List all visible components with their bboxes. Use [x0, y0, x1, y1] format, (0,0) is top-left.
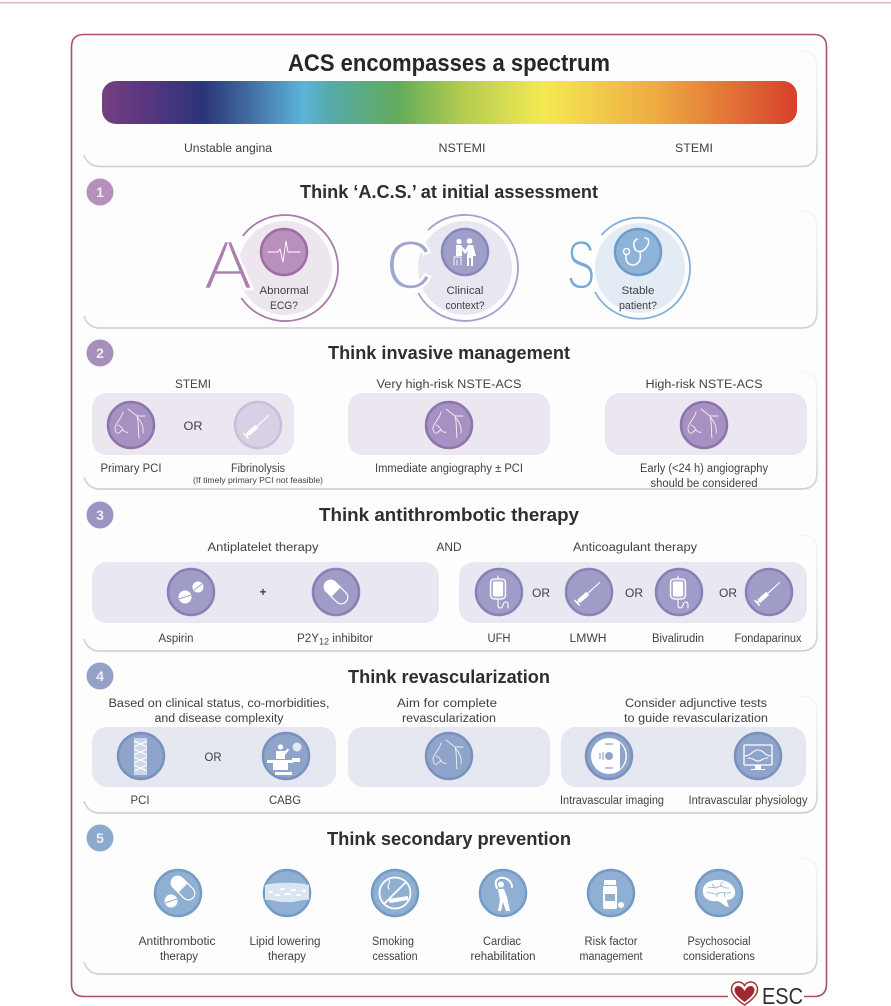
column: high-risk: should be considered [650, 478, 758, 490]
panel: spectrum [84, 50, 817, 166]
column: very high-risk: Very high-risk NSTE-ACS [376, 379, 522, 391]
column: very high-risk: Immediate angiography ± PCI [375, 463, 523, 475]
heading 1: Think ‘A.C.S.’ at initial assessment [300, 182, 598, 202]
group: anticoagulant therapy: OR [625, 586, 643, 600]
item: antithrombotic therapy [138, 870, 216, 963]
item: S stable patient: S [566, 226, 596, 304]
group: PCI or CABG: OR [204, 750, 222, 764]
group: adjunctive tests: Intravascular imaging [560, 795, 664, 807]
column: STEMI: STEMI [175, 379, 211, 391]
item: psychosocial considerations: considerations [683, 951, 755, 963]
group: anticoagulant therapy: UFH [488, 633, 510, 645]
item: C clinical context: context? [446, 300, 484, 312]
item: risk factor management: management [580, 951, 643, 963]
ESC logo [732, 982, 803, 1006]
group: PCI or CABG: Based on clinical status, co-morbidities, [108, 698, 330, 710]
group: antiplatelet therapy: inhibitor [329, 633, 373, 645]
group: PCI or CABG: CABG [269, 795, 301, 807]
column: very high-risk [348, 379, 550, 475]
panel 5: secondary prevention [84, 824, 817, 974]
column: high-risk: Early (<24 h) angiography [640, 463, 768, 475]
item: lipid lowering therapy [250, 870, 320, 963]
badge 3 [86, 502, 114, 528]
item: C clinical context: C [386, 226, 432, 304]
heading 2: Think invasive management [328, 343, 570, 363]
badge 1 [86, 178, 114, 206]
badge 2 [86, 340, 114, 366]
group: adjunctive tests: Consider adjunctive tests [625, 698, 767, 710]
column: STEMI [92, 379, 323, 485]
badge 2: 2 [96, 345, 104, 361]
group: antiplatelet therapy [92, 542, 439, 646]
item: S stable patient [566, 218, 690, 319]
item: S stable patient: patient? [619, 300, 657, 312]
item: cardiac rehabilitation [470, 870, 536, 963]
item: lipid lowering therapy: Lipid lowering [250, 936, 320, 948]
column: STEMI: Primary PCI [100, 463, 162, 475]
badge 5 [86, 824, 114, 852]
panel 4: revascularization [84, 662, 817, 813]
item: cardiac rehabilitation: rehabilitation [470, 951, 536, 963]
item: antithrombotic therapy: Antithrombotic [138, 936, 216, 948]
item: risk factor management: Risk factor [584, 936, 638, 948]
group: PCI or CABG: and disease complexity [154, 713, 284, 725]
spectrum labels [184, 143, 713, 155]
column: high-risk [605, 379, 807, 490]
group: anticoagulant therapy [459, 542, 807, 645]
column: STEMI: OR [184, 419, 203, 433]
group: anticoagulant therapy: Anticoagulant therapy [573, 542, 697, 554]
badge 4: 4 [96, 668, 104, 684]
spectrum labels: NSTEMI [438, 143, 486, 155]
badge 4 [86, 662, 114, 690]
heading 5: Think secondary prevention [327, 829, 571, 849]
group: anticoagulant therapy: OR [532, 586, 550, 600]
item: A abnormal ECG: Abnormal [260, 285, 308, 297]
item: S stable patient: Stable [622, 285, 654, 297]
column: STEMI: (If timely primary PCI not feasible) [193, 476, 323, 485]
badge 3: 3 [96, 507, 104, 523]
group: adjunctive tests: to guide revascularization [624, 713, 768, 725]
spectrum labels: Unstable angina [184, 143, 273, 155]
group: anticoagulant therapy: Fondaparinux [734, 633, 802, 645]
item: C clinical context [386, 215, 518, 321]
page top rule [0, 2, 891, 4]
column: high-risk: High-risk NSTE-ACS [646, 379, 763, 391]
heading 3: Think antithrombotic therapy [319, 505, 579, 525]
item: risk factor management [580, 870, 643, 963]
group: PCI or CABG [92, 698, 336, 807]
group: complete revascularization [348, 698, 550, 787]
group: antiplatelet therapy: + [260, 587, 267, 599]
item: psychosocial considerations: Psychosocial [688, 936, 750, 948]
item: smoking cessation [372, 870, 418, 963]
panel 2: invasive management [84, 340, 817, 490]
group: anticoagulant therapy: OR [719, 586, 737, 600]
group: anticoagulant therapy: Bivalirudin [652, 633, 704, 645]
panel 3: antithrombotic therapy [84, 502, 817, 651]
title: ACS encompasses a spectrum [288, 50, 610, 77]
panel 1: think A.C.S. [84, 178, 817, 328]
group: antiplatelet therapy: 12 [319, 636, 329, 646]
group: adjunctive tests: Intravascular physiology [688, 795, 808, 807]
item: antithrombotic therapy: therapy [160, 951, 198, 963]
spectrum bar [102, 81, 797, 124]
group: anticoagulant therapy: LMWH [570, 633, 606, 645]
heading 4: Think revascularization [348, 667, 550, 687]
and label: AND [436, 542, 462, 554]
item: C clinical context: Clinical [446, 285, 484, 297]
item: smoking cessation: cessation [372, 951, 418, 963]
item: lipid lowering therapy: therapy [268, 951, 306, 963]
group: antiplatelet therapy: P2Y [297, 633, 319, 645]
item: A abnormal ECG [204, 215, 338, 321]
item: A abnormal ECG: A [204, 226, 253, 304]
group: antiplatelet therapy: Aspirin [158, 633, 194, 645]
column: STEMI: Fibrinolysis [231, 463, 285, 475]
spectrum labels: STEMI [675, 143, 713, 155]
group: complete revascularization: revascularization [402, 713, 496, 725]
group: complete revascularization: Aim for complete [397, 698, 497, 710]
badge 1: 1 [96, 184, 104, 200]
item: smoking cessation: Smoking [372, 936, 414, 948]
badge 5: 5 [96, 830, 104, 846]
group: PCI or CABG: PCI [130, 795, 150, 807]
item: cardiac rehabilitation: Cardiac [483, 936, 521, 948]
item: psychosocial considerations [683, 870, 755, 963]
group: antiplatelet therapy: Antiplatelet therapy [208, 542, 319, 554]
group: adjunctive tests [560, 698, 808, 807]
item: A abnormal ECG: ECG? [270, 300, 298, 312]
